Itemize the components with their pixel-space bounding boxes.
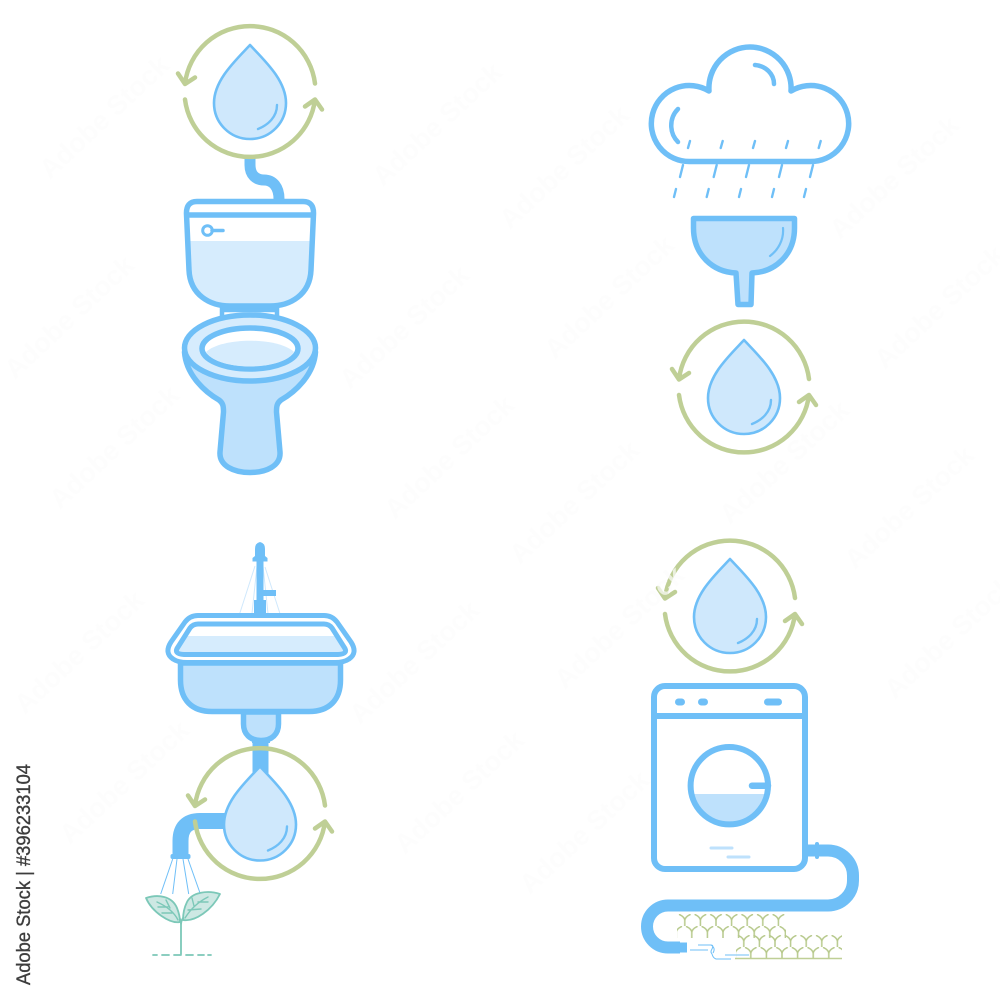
watermark pattern: Adobe Stock [494, 99, 635, 234]
icon: recycling arrows [178, 26, 322, 157]
panel: washing machine water reuse [647, 541, 853, 959]
sink basin [180, 663, 340, 712]
grass field [677, 914, 842, 959]
icon: funnel [694, 218, 794, 304]
watermark pattern: Adobe Stock [539, 229, 680, 364]
watermark pattern: Adobe Stock [34, 49, 175, 184]
icon: recycling arrows [658, 541, 802, 671]
watermark pattern: Adobe Stock [504, 434, 645, 569]
watermark pattern: Adobe Stock [379, 389, 520, 524]
watermark pattern: Adobe Stock [54, 714, 195, 849]
icon: recycling arrows [672, 322, 816, 452]
icon: water drop [694, 559, 766, 653]
watermark pattern: Adobe Stock [0, 249, 140, 384]
watermark pattern: Adobe Stock [9, 584, 150, 719]
drain hose [647, 842, 853, 952]
watermark pattern: Adobe Stock [714, 394, 855, 529]
sink rim [168, 616, 354, 662]
pipe: drain to tap [170, 740, 270, 859]
watermark pattern: Adobe Stock [389, 724, 530, 859]
panel: sink water reuse [146, 542, 354, 955]
icon: cloud [651, 47, 849, 162]
icon: water drop [224, 766, 296, 860]
icon: rain drops [674, 141, 821, 197]
icon: faucet [237, 542, 283, 623]
water streams [161, 859, 200, 894]
panel: rainwater harvesting [651, 47, 849, 452]
watermark pattern: Adobe Stock [344, 594, 485, 729]
icon: water drop [708, 340, 780, 434]
icon: seedling [146, 892, 220, 955]
toilet bowl [184, 315, 316, 472]
watermark pattern: Adobe Stock [44, 379, 185, 514]
watermark pattern: Adobe Stock [367, 56, 508, 191]
toilet neck [222, 306, 277, 318]
stock id label: Adobe Stock | #396233104 [14, 764, 35, 985]
sink drain trap [244, 712, 278, 740]
pipe: drop to toilet tank [250, 156, 279, 199]
watermark pattern: Adobe Stock [514, 764, 655, 899]
icon: water drop [214, 45, 286, 139]
water trickle [690, 945, 749, 959]
watermark pattern: Adobe Stock [334, 259, 475, 394]
panel: toilet water recycling [178, 26, 322, 473]
toilet tank [186, 202, 314, 306]
icon: recycling arrows [188, 748, 332, 879]
watermark pattern: Adobe Stock [824, 109, 965, 244]
watermark pattern: Adobe Stock [839, 439, 980, 574]
washing machine body [654, 686, 805, 869]
watermark pattern: Adobe Stock [549, 559, 690, 694]
